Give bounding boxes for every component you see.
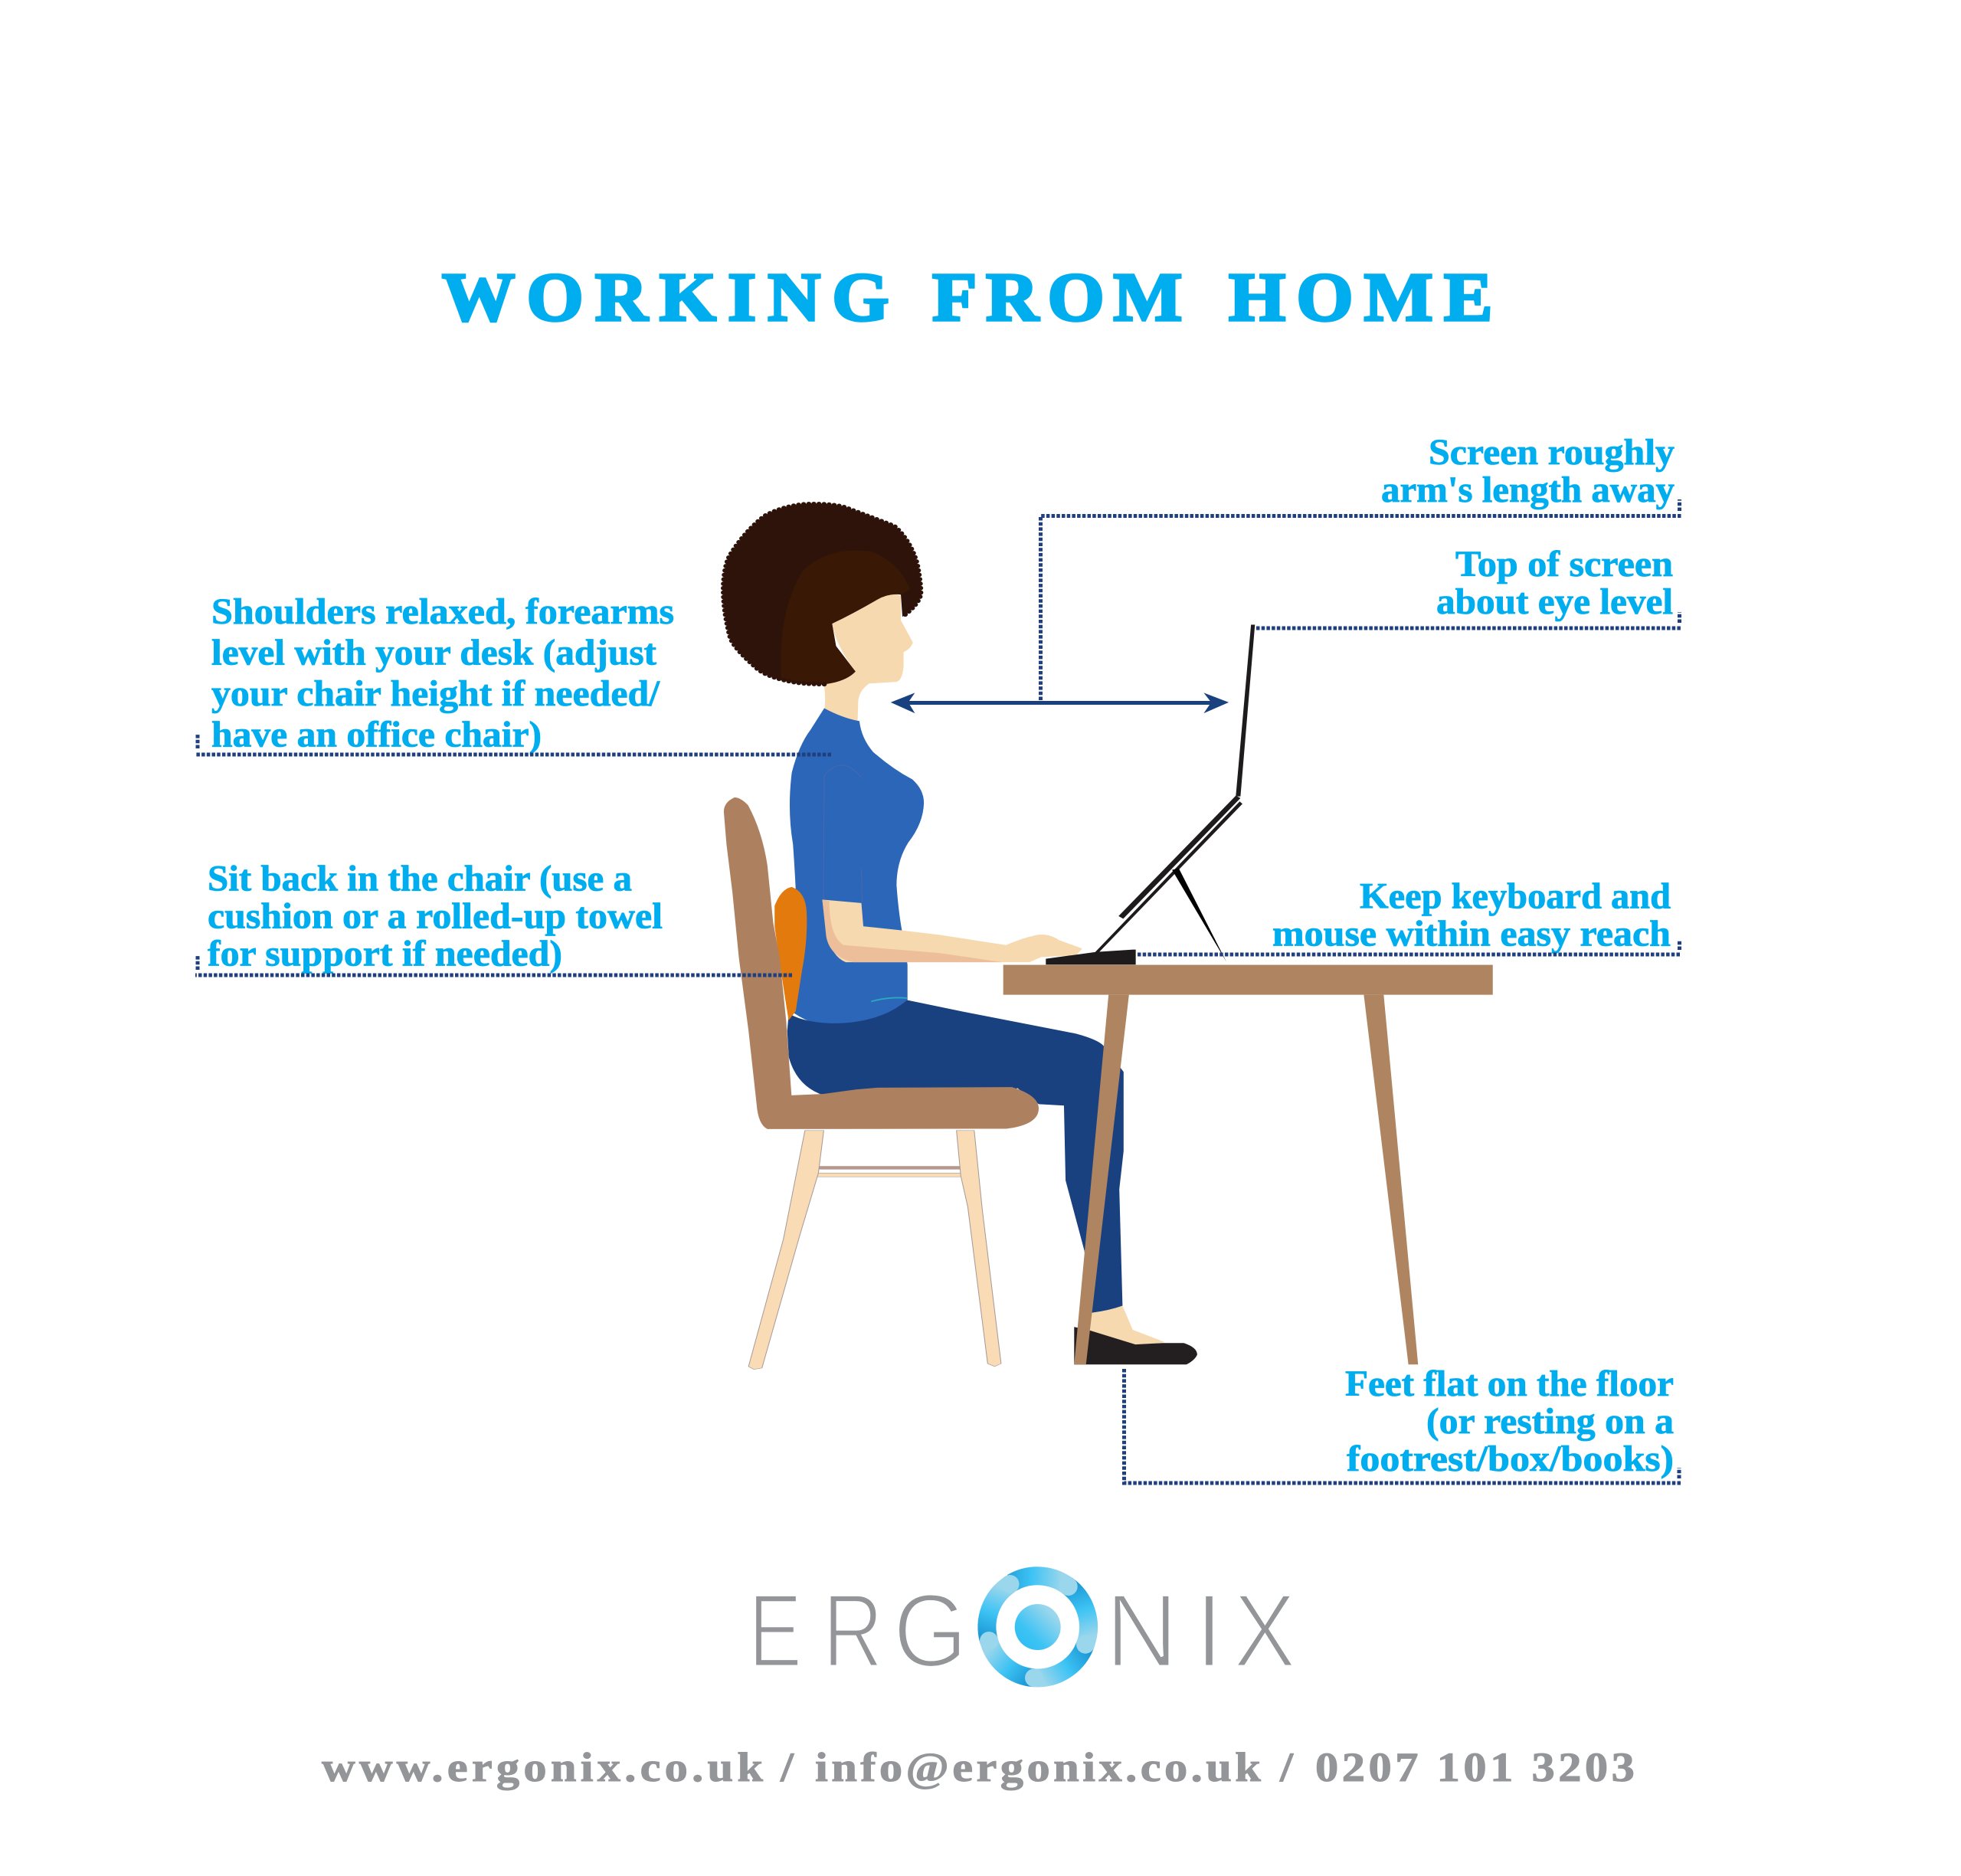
laptop screen — [1236, 625, 1255, 797]
callout: screen roughly arm's length away: Screen roughly — [1429, 432, 1675, 473]
front desk leg — [1074, 995, 1129, 1364]
keyboard — [1046, 950, 1136, 964]
logo ring — [980, 1575, 1095, 1687]
footer contact details — [322, 1745, 1635, 1790]
callout: keep keyboard and mouse within easy reach: mouse within easy reach — [1272, 913, 1671, 954]
logo wordmark left: G — [893, 1572, 967, 1688]
hair — [723, 504, 921, 684]
head and neck — [823, 594, 913, 725]
logo wordmark left — [748, 1572, 967, 1688]
footer contact details: / — [780, 1745, 794, 1790]
callout: feet flat on the floor — [1125, 1364, 1681, 1483]
arm and hand — [822, 899, 1082, 962]
callout: shoulders relaxed: level with your desk (adjust — [211, 633, 656, 673]
callout: top of screen about eye level: about eye level — [1436, 581, 1673, 622]
laptop and keyboard — [1046, 625, 1255, 964]
desk — [1003, 965, 1493, 1364]
logo wordmark right: I — [1195, 1572, 1223, 1688]
callout: shoulders relaxed — [195, 591, 831, 755]
footer contact details: www.ergonix.co.uk — [322, 1745, 763, 1790]
shirt — [790, 708, 924, 1029]
title — [442, 259, 1492, 336]
logo: ERGONIX — [748, 1572, 1296, 1688]
callout: keep keyboard and mouse within easy reach: Keep keyboard and — [1360, 876, 1671, 916]
callout: top of screen about eye level: Top of screen — [1455, 544, 1673, 584]
logo wordmark left: E — [748, 1572, 802, 1688]
logo wordmark right: N — [1105, 1572, 1178, 1688]
logo wordmark left: R — [823, 1572, 883, 1688]
footer contact details: 0207 101 3203 — [1315, 1745, 1635, 1790]
footer contact details: / — [1279, 1745, 1294, 1790]
chair seat and back — [724, 797, 1039, 1129]
callout: sit back in the chair: for support if needed) — [208, 933, 562, 974]
figure: woman seated at desk — [723, 504, 1493, 1370]
chair legs — [748, 1131, 1001, 1370]
callout: sit back in the chair: Sit back in the chair (use a — [208, 858, 632, 899]
logo wordmark right: X — [1233, 1572, 1296, 1688]
callout: feet flat on the floor: footrest/box/books) — [1347, 1439, 1674, 1479]
callout: shoulders relaxed: have an office chair) — [211, 714, 542, 755]
trousers — [787, 1000, 1124, 1313]
callout: top of screen about eye level — [1256, 544, 1681, 628]
footer contact details: info@ergonix.co.uk — [815, 1745, 1261, 1790]
laptop stand — [1172, 868, 1226, 962]
lumbar cushion — [774, 887, 807, 1020]
logo wordmark right — [1105, 1572, 1296, 1688]
title: HOME — [1229, 259, 1492, 336]
title: WORKING — [442, 259, 889, 336]
foot and shoe — [1074, 1306, 1197, 1364]
callout: feet flat on the floor: (or resting on a — [1426, 1401, 1674, 1442]
callout: shoulders relaxed: Shoulders relaxed, forearms — [211, 591, 674, 632]
callout: shoulders relaxed: your chair height if needed/ — [211, 673, 660, 714]
title: FROM — [932, 259, 1182, 336]
callout: feet flat on the floor: Feet flat on the floor — [1345, 1364, 1674, 1404]
callout: screen roughly arm's length away: arm's length away — [1381, 470, 1675, 510]
callout: screen roughly arm's length away — [1040, 432, 1681, 700]
arrow: screen distance — [891, 692, 1229, 713]
laptop body — [1118, 796, 1240, 918]
callout: sit back in the chair: cushion or a rolled-up towel — [208, 896, 663, 936]
callout: keep keyboard and mouse within easy reach — [1138, 876, 1681, 954]
callout: sit back in the chair — [195, 858, 792, 975]
